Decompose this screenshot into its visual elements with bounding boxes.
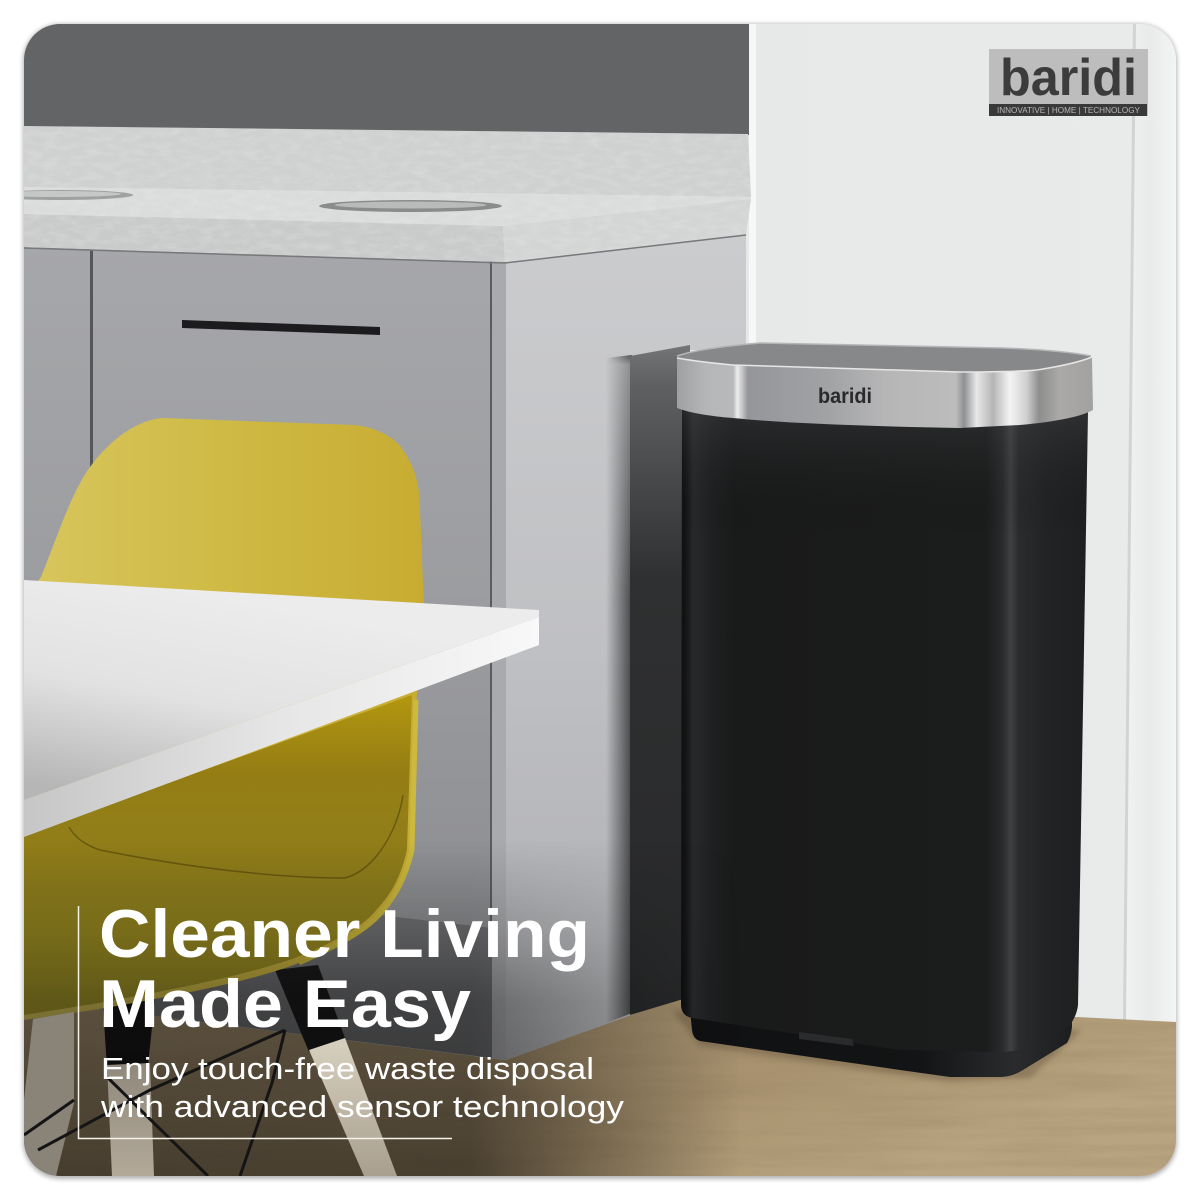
- worktop surface: [24, 187, 751, 226]
- chair lower seat: [24, 695, 412, 1015]
- yellow chair shell: [24, 418, 424, 1020]
- chair seat crease: [69, 795, 403, 878]
- cabinet toe kick: [98, 916, 492, 1058]
- logo wordmark: baridi: [1000, 49, 1137, 107]
- foot pedal sensor: [799, 1032, 854, 1046]
- cabinet front: [24, 247, 505, 930]
- bin body: [681, 410, 1088, 1052]
- soft shadow edge behind bin: [606, 355, 632, 1023]
- subheading: with advanced sensor technology: [100, 1089, 625, 1124]
- countertop: [0, 126, 754, 266]
- bin lid: [677, 343, 1091, 372]
- logo tagline strip: [989, 104, 1147, 116]
- rim top highlight: [677, 357, 1092, 372]
- cabinet side: [506, 234, 746, 1060]
- dark grey kitchen wall: [24, 24, 749, 135]
- white table: [24, 580, 539, 837]
- table edge: [24, 617, 539, 837]
- headline: Cleaner Living: [99, 896, 590, 972]
- text block bracket: [78, 906, 452, 1138]
- smart bin: [672, 343, 1093, 1082]
- chair black sleeves: [102, 965, 345, 1068]
- counter cut-out right: [319, 200, 502, 212]
- headline: Made Easy: [99, 966, 471, 1042]
- bin logo: baridi: [818, 385, 872, 408]
- bottom dark gradient: [0, 840, 760, 1180]
- logo: [989, 49, 1148, 116]
- shadow behind bin: [630, 345, 690, 1015]
- counter cut-out left: [24, 190, 133, 200]
- worktop front face: [24, 214, 505, 262]
- subheading: Enjoy touch-free waste disposal: [101, 1051, 594, 1086]
- bin floor shadow: [672, 1010, 1082, 1082]
- backsplash: [24, 126, 751, 197]
- chair right edge highlight: [299, 700, 416, 963]
- stainless steel rim: [677, 357, 1093, 428]
- worktop side face: [503, 199, 751, 262]
- chair white legs and wires: [24, 1012, 397, 1176]
- cabinet door seams: [90, 250, 492, 930]
- lid edge highlight: [677, 343, 1091, 356]
- logo tagline: INNOVATIVE | HOME | TECHNOLOGY: [997, 106, 1141, 115]
- marble texture: [74, 126, 680, 250]
- logo background: [989, 49, 1148, 116]
- table top: [24, 580, 539, 800]
- bin base: [690, 1018, 1072, 1077]
- wall panel trim: [749, 24, 1176, 1024]
- wood floor: [24, 990, 1176, 1176]
- cabinet corner strip: [492, 260, 506, 1060]
- counter underside shadow: [24, 235, 746, 263]
- bin body shading: [682, 410, 1088, 454]
- cabinet handle: [182, 320, 380, 335]
